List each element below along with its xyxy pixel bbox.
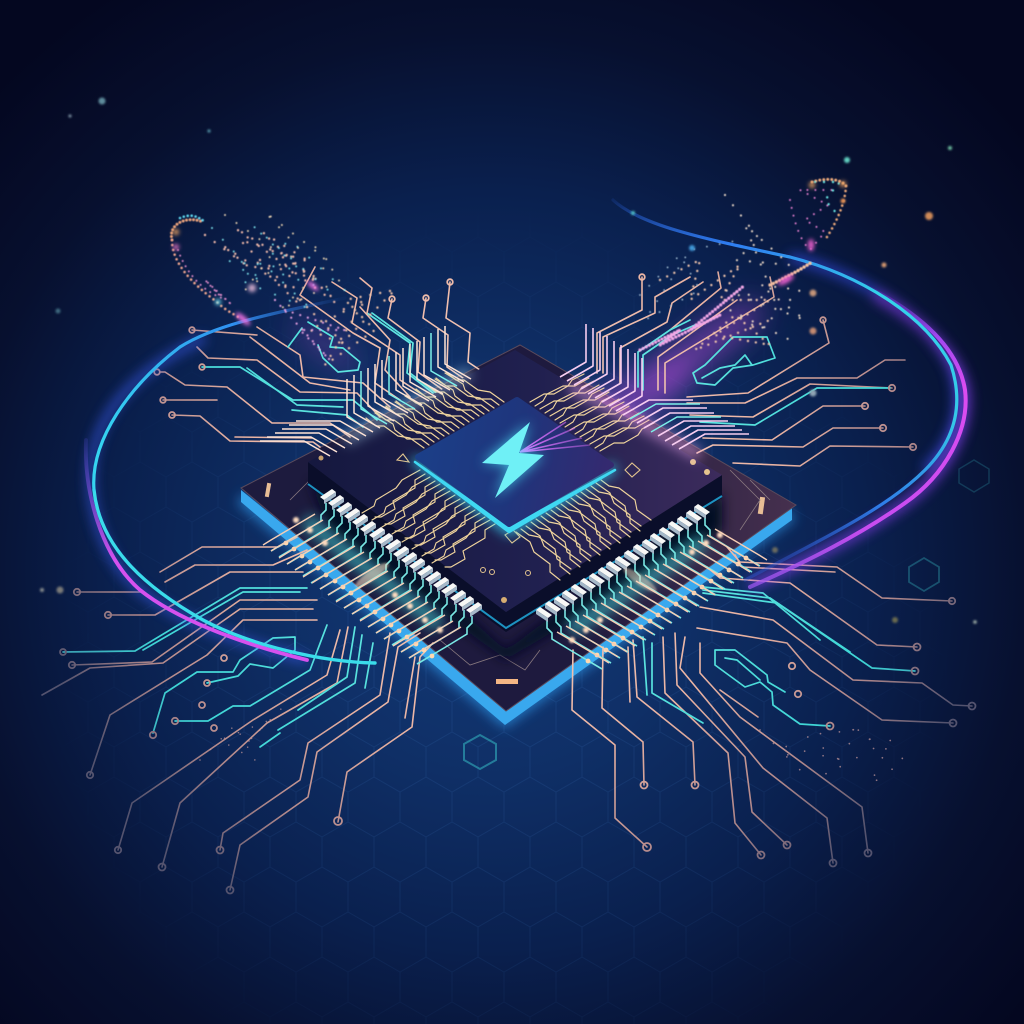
traces: lower right xyxy=(572,547,976,866)
traces: lower left xyxy=(42,537,433,894)
central plate glow xyxy=(414,459,615,531)
particle cloud: right xyxy=(640,179,846,350)
circuit board: top surface xyxy=(241,345,796,711)
particle cloud: right highlights xyxy=(777,181,846,287)
particle cloud: left xyxy=(171,212,395,365)
luminous haze along upper chip edges xyxy=(345,372,700,455)
orbit ring: right arc xyxy=(613,200,966,587)
orbit ring: left arc xyxy=(86,298,375,663)
hexagon grid xyxy=(156,332,849,1020)
icon: lightning bolt glow xyxy=(482,422,544,498)
stray glowing particles xyxy=(40,98,977,624)
traces: upper right xyxy=(597,272,916,466)
chip: pins, lower-left side xyxy=(263,489,482,664)
particle scatter: lower corners xyxy=(200,700,905,785)
particle cloud: left highlights xyxy=(173,229,320,327)
teal haze under pins xyxy=(305,520,705,630)
pad highlights along the chip edges xyxy=(293,517,723,643)
bright trace fan: upper-right chip edge xyxy=(560,324,749,449)
highlighted hexagons xyxy=(464,460,989,769)
central plate xyxy=(415,400,615,532)
traces: upper left xyxy=(154,267,480,447)
magenta data haze xyxy=(285,290,773,444)
chip: body thickness xyxy=(308,462,722,632)
chip: pins, lower-right side xyxy=(536,504,767,669)
orbit ring: glow xyxy=(91,257,966,660)
icon: lightning bolt xyxy=(482,422,544,498)
chip: shadow xyxy=(308,478,722,660)
circuit board: blue base edge xyxy=(241,490,792,725)
chip: top surface xyxy=(308,350,722,612)
chip: gold surface traces xyxy=(318,372,710,603)
bright trace fan: upper-left chip edge xyxy=(260,326,471,456)
energy streaks from bolt xyxy=(520,422,590,452)
